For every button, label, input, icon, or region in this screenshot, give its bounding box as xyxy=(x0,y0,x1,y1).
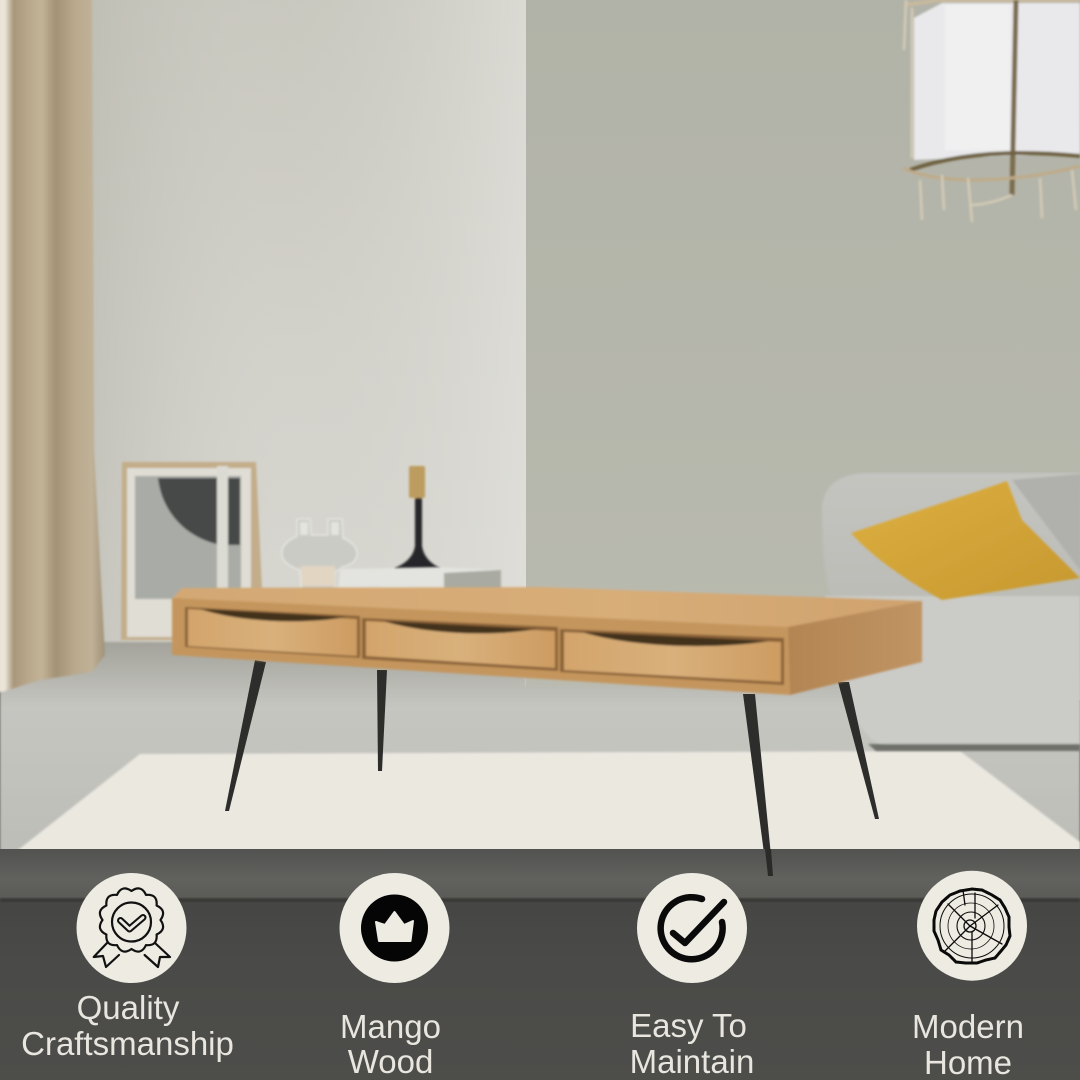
icon: rosette badge xyxy=(76,873,186,983)
feature: quality craftsmanship xyxy=(21,873,234,1062)
left drawer xyxy=(188,609,357,656)
middle drawer slot xyxy=(383,621,537,633)
label: mango wood: Wood xyxy=(348,1043,433,1080)
middle drawer xyxy=(366,621,555,668)
right drawer slot xyxy=(582,632,770,646)
left wall xyxy=(90,0,526,700)
label: modern home: Modern xyxy=(912,1008,1024,1045)
curtain xyxy=(0,0,105,692)
floor xyxy=(0,642,1080,860)
right drawer xyxy=(564,632,781,682)
feature: mango wood xyxy=(340,873,450,1080)
right wall xyxy=(520,0,1080,700)
feature: easy to maintain xyxy=(630,873,754,1080)
label: quality craftsmanship: Quality xyxy=(77,989,180,1026)
table legs xyxy=(225,660,879,876)
icon: check mark xyxy=(637,873,747,983)
book xyxy=(338,567,501,596)
framed art xyxy=(121,462,262,640)
coffee table xyxy=(172,587,922,695)
drawer gaps xyxy=(185,607,784,685)
glass vase xyxy=(282,519,357,596)
tabletop xyxy=(172,587,922,628)
icon: wood rings xyxy=(917,871,1027,981)
label: modern home: Home xyxy=(924,1044,1012,1080)
left drawer slot xyxy=(200,609,346,621)
panel: dark feature band xyxy=(0,849,1080,1080)
label: quality craftsmanship: Craftsmanship xyxy=(21,1025,234,1062)
icon: crown xyxy=(340,873,450,983)
candle holder xyxy=(395,466,440,572)
sofa xyxy=(822,473,1080,751)
pendant lamp xyxy=(903,0,1080,222)
feature: modern home xyxy=(912,871,1027,1080)
table front frame xyxy=(172,598,790,695)
label: easy to maintain: Easy To xyxy=(630,1007,747,1044)
table end panel xyxy=(788,601,922,695)
icon: yellow cushion xyxy=(851,481,1080,600)
label: easy to maintain: Maintain xyxy=(630,1043,754,1080)
rug xyxy=(18,751,1080,860)
label: mango wood: Mango xyxy=(340,1008,441,1045)
